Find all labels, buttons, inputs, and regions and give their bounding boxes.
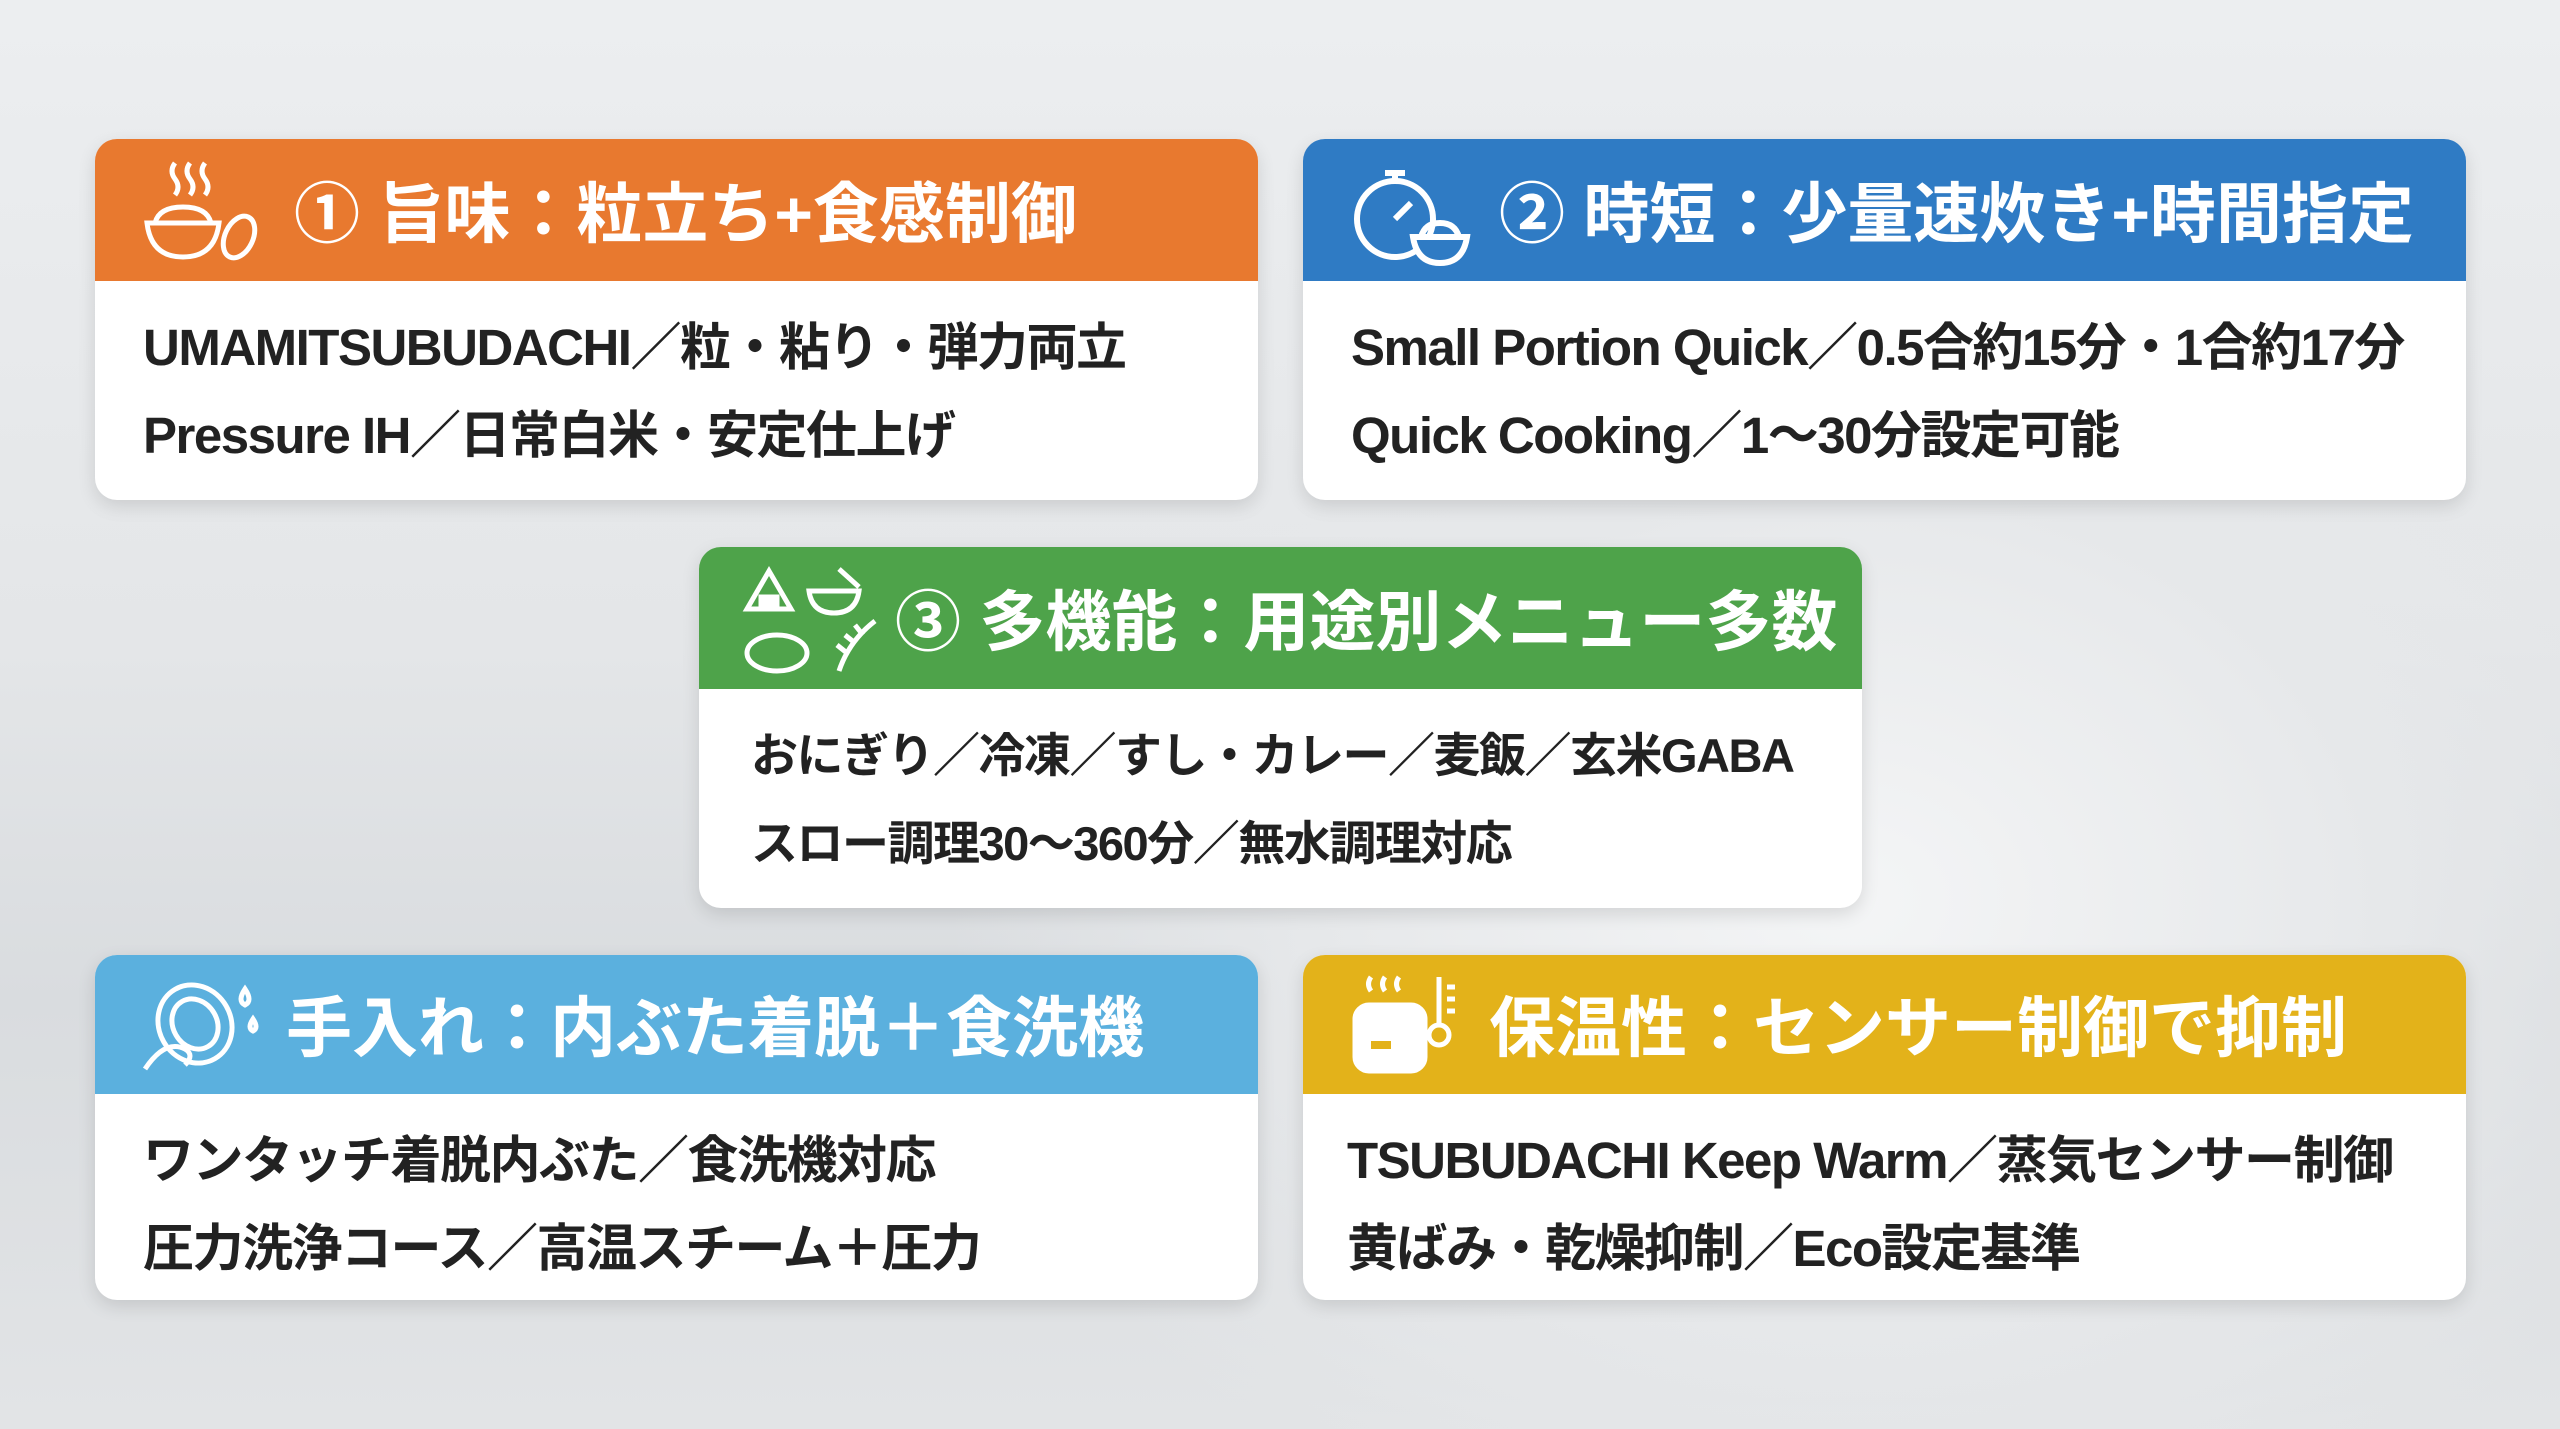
header: multi-function: ③ 多機能：用途別メニュー多数 [895,585,1837,659]
header: multi-function [699,547,1862,689]
icon: rice bowl [144,162,258,260]
body text: スロー調理30〜360分／無水調理対応 [751,817,1511,870]
panel: multi-function [699,547,1862,908]
body text [751,729,1794,870]
body text: TSUBUDACHI Keep Warm／蒸気センサー制御 [1347,1132,2393,1189]
body text [1351,319,2405,464]
body text: 圧力洗浄コース／高温スチーム＋圧力 [143,1220,980,1277]
header: keep warm [1303,955,2466,1094]
panel: umami [95,139,1258,500]
body text [143,319,1125,464]
header: maintenance [95,955,1258,1094]
icon: food menu [742,566,876,674]
body text: Pressure IH／日常白米・安定仕上げ [143,407,954,464]
header: maintenance: 手入れ：内ぶた着脱＋食洗機 [286,991,1144,1065]
header: time saving [1303,139,2466,281]
body text [143,1132,980,1277]
body text: UMAMITSUBUDACHI／粒・粘り・弾力両立 [143,319,1125,376]
body text [1347,1132,2393,1277]
panel: keep warm [1303,955,2466,1300]
body text: おにぎり／冷凍／すし・カレー／麦飯／玄米GABA [751,729,1793,782]
panel: time saving [1303,139,2466,500]
header: time saving: ② 時短：少量速炊き+時間指定 [1499,177,2414,251]
body text: ワンタッチ着脱内ぶた／食洗機対応 [143,1132,935,1189]
icon: washing lid [143,982,258,1070]
body text: Small Portion Quick／0.5合約15分・1合約17分 [1351,319,2404,376]
body text: 黄ばみ・乾燥抑制／Eco設定基準 [1347,1220,2080,1277]
header: umami [95,139,1258,281]
panel: maintenance [95,955,1258,1300]
icon: stopwatch and bowl [1354,170,1470,266]
header: keep warm: 保温性：センサー制御で抑制 [1489,991,2347,1065]
icon: cooker with thermometer [1352,976,1455,1074]
body text: Quick Cooking／1〜30分設定可能 [1351,407,2118,464]
header: umami: ① 旨味：粒立ち+食感制御 [294,177,1077,251]
